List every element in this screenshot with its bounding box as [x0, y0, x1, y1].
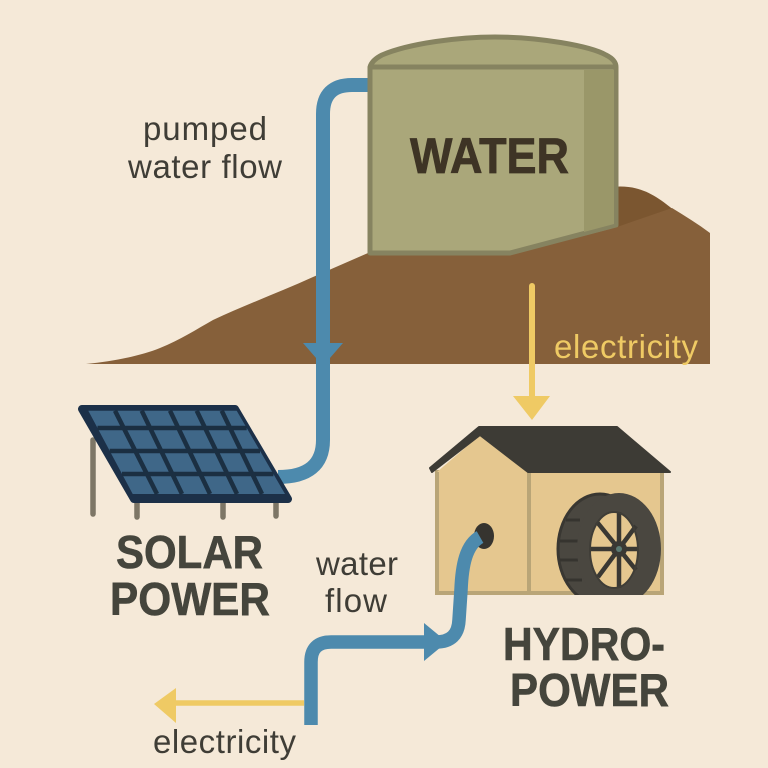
heading: solar power: POWER [110, 573, 270, 625]
heading: solar power: SOLAR [116, 526, 263, 578]
label: water flow: water [315, 545, 398, 582]
hydro house [430, 427, 670, 605]
heading: hydro-power: POWER [510, 664, 669, 716]
arrow: electricity output [154, 688, 304, 723]
tank label: WATER [410, 128, 569, 184]
label: electricity lower: electricity [153, 723, 296, 760]
arrow: electricity to hydro house [513, 286, 550, 420]
heading: hydro-power: HYDRO- [503, 618, 665, 670]
label: water flow: flow [325, 582, 387, 619]
label: water flow [315, 545, 398, 619]
label: pumped water flow: water flow [127, 148, 282, 185]
solar panel [82, 409, 288, 517]
arrow: pumped water pipe [278, 85, 370, 477]
water wheel [558, 493, 661, 605]
label: pumped water flow: pumped [143, 110, 267, 147]
heading: hydro-power [503, 618, 669, 716]
arrow: water flow pipe [311, 537, 480, 725]
water tank [370, 37, 616, 253]
heading: solar power [110, 526, 270, 625]
label: electricity upper: electricity [554, 328, 698, 365]
pipe outlet [474, 523, 494, 549]
label: pumped water flow [127, 110, 282, 185]
hill [86, 187, 710, 364]
